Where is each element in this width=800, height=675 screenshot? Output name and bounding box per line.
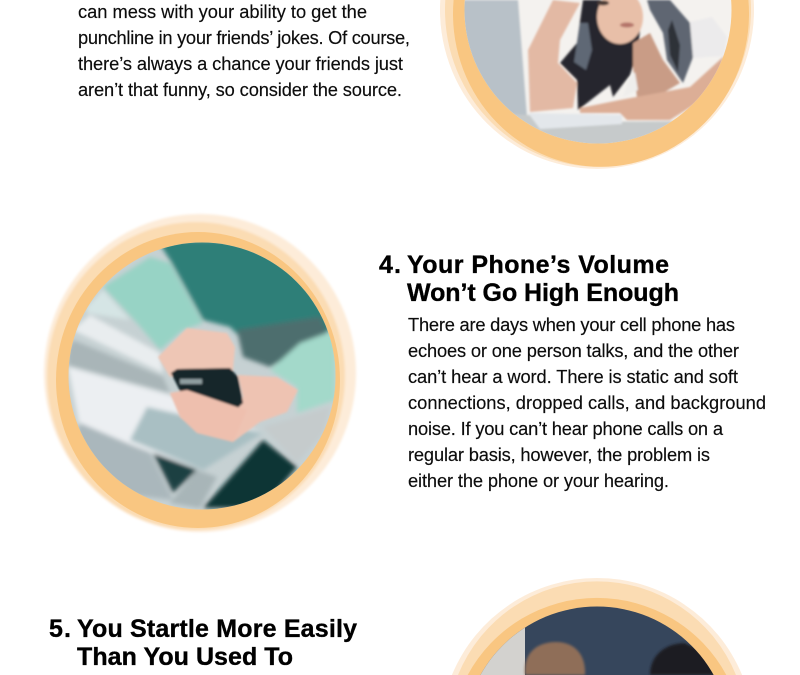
text block: point 3 paragraph ending [78,1,410,100]
heading: point 4 [379,251,679,307]
text block: point 4 paragraph: either the phone or your hearing. [408,470,669,491]
text block: point 3 paragraph ending: aren’t that funny, so consider the source. [78,79,402,100]
heading: point 4: 4. [379,251,401,279]
heading: point 5: 5. [49,615,71,643]
text block: point 4 paragraph: echoes or one person talks, and the other [408,340,739,361]
text block: point 4 paragraph: can’t hear a word. There is static and soft [408,366,738,387]
photo circle: hands holding phone [44,214,356,532]
text block: point 4 paragraph: There are days when your cell phone has [408,314,735,335]
heading: point 4: Won’t Go High Enough [407,279,679,307]
text block: point 4 paragraph: noise. If you can’t hear phone calls on a [408,418,724,439]
text block: point 3 paragraph ending: can mess with your ability to get the [78,1,367,22]
heading: point 5 [49,615,357,671]
text block: point 3 paragraph ending: punchline in your friends’ jokes. Of course, [78,27,410,48]
photo circle: woman at laptop [440,0,754,169]
heading: point 4: Your Phone’s Volume [407,251,669,279]
text block: point 4 paragraph: regular basis, however, the problem is [408,444,710,465]
photo circle: two people [452,578,742,675]
heading: point 5: Than You Used To [77,643,293,671]
text block: point 3 paragraph ending: there’s always a chance your friends just [78,53,403,74]
text block: point 4 paragraph: connections, dropped calls, and background [408,392,766,413]
heading: point 5: You Startle More Easily [77,615,357,643]
text block: point 4 paragraph [408,314,766,491]
